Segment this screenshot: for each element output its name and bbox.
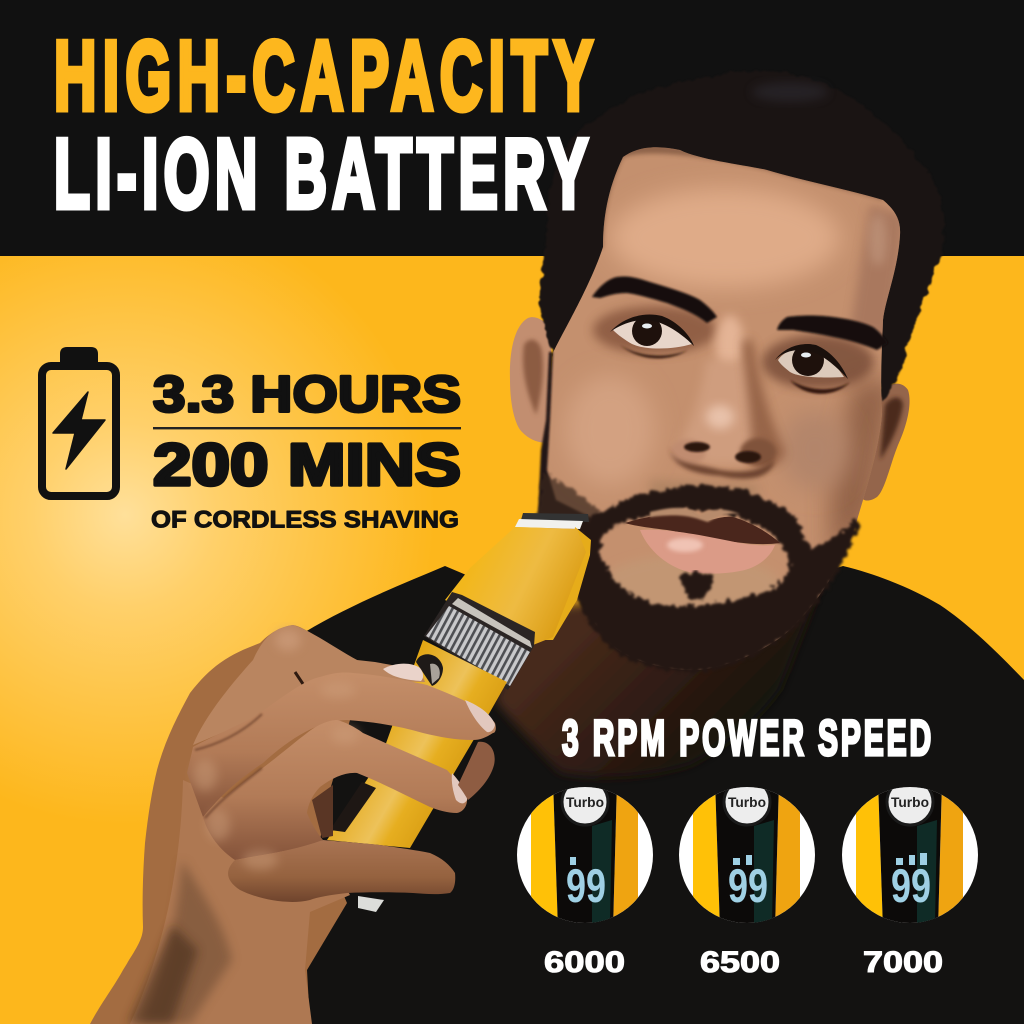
- trimmer button: [416, 654, 443, 686]
- upper lip: [625, 512, 780, 544]
- beard: [576, 487, 857, 670]
- right eyebrow: [777, 316, 888, 350]
- trimmer guard: [540, 527, 591, 640]
- eye socket shadows: [593, 306, 717, 354]
- speed dial 6000: [517, 779, 653, 979]
- dial close-up 2: 99: [728, 859, 768, 912]
- forearm and hand base: [90, 625, 357, 1024]
- thumb crease: [295, 672, 303, 684]
- speed dial 6500: [679, 779, 815, 979]
- title: [54, 22, 599, 229]
- index finger: [187, 672, 496, 817]
- lower lip shine: [667, 538, 703, 552]
- right cheek shade: [830, 380, 895, 560]
- arm hair light: [140, 860, 232, 1024]
- trimmer upper body: [445, 527, 586, 645]
- finger behind trimmer: [458, 742, 495, 800]
- thumb nail: [383, 664, 423, 681]
- runtime in minutes: 200 MINS: [153, 432, 461, 498]
- title line 2: LI-ION BATTERY: [54, 120, 594, 229]
- dial close-up 3: 99: [891, 859, 931, 912]
- nose bridge highlight: [716, 315, 744, 375]
- rpm value 7000: 7000: [863, 946, 943, 979]
- yellow background panel: [0, 250, 1024, 1024]
- hairline shadow: [603, 148, 883, 248]
- forehead highlight: [610, 188, 840, 288]
- soul patch: [680, 573, 714, 600]
- dial close-up 1: [517, 779, 653, 930]
- dial close-up 1: Turbo: [566, 794, 604, 810]
- black header band: [0, 0, 1024, 256]
- left eye: [610, 315, 694, 358]
- dial close-up 3: Turbo: [891, 794, 929, 810]
- nose tip highlight: [706, 405, 734, 429]
- nostrils: [684, 442, 710, 452]
- gap between fingers: [312, 785, 333, 838]
- lower lip: [640, 530, 775, 574]
- nose base: [670, 452, 776, 482]
- middle finger: [203, 720, 467, 860]
- chin skin: [600, 555, 780, 615]
- dial close-up 2: Turbo: [728, 794, 766, 810]
- hand: [90, 625, 496, 1024]
- rpm value 6000: 6000: [544, 946, 625, 979]
- right eye: [775, 344, 850, 394]
- trimmer dark lower ring: [424, 592, 535, 690]
- right temple shade: [850, 205, 905, 340]
- nose wings: [678, 440, 706, 461]
- dial close-up 3: [842, 779, 978, 930]
- right temple shine: [869, 214, 887, 266]
- battery runtime text block: [151, 366, 461, 534]
- trimmer end cap: [358, 896, 384, 912]
- icon: battery with lightning bolt: [42, 347, 116, 496]
- runtime caption: OF CORDLESS SHAVING: [151, 506, 459, 534]
- thumb base: [193, 625, 425, 745]
- arm hair dark: [128, 925, 198, 1024]
- neck: [495, 560, 830, 776]
- sideburn line: [538, 352, 592, 530]
- runtime in hours: 3.3 HOURS: [153, 366, 461, 422]
- chrome band: [452, 598, 532, 648]
- back of hand: [130, 780, 350, 1024]
- finger creases: [195, 714, 262, 818]
- rpm value 6500: 6500: [700, 946, 780, 979]
- left eyebrow: [592, 276, 717, 323]
- dial close-up 2: [679, 779, 815, 930]
- philtrum tone: [648, 479, 758, 495]
- speed dial 7000: [842, 779, 978, 979]
- index nail: [465, 700, 495, 732]
- lip ridge: [650, 508, 740, 522]
- trimmer: [327, 513, 591, 912]
- left ear: [510, 317, 552, 443]
- black t-shirt: [300, 566, 1024, 1024]
- face skin: [540, 147, 900, 670]
- trimmer long body: [327, 640, 507, 848]
- right ear: [860, 384, 910, 501]
- title line 1: HIGH-CAPACITY: [54, 22, 599, 131]
- dial close-up 1: 99: [566, 859, 606, 912]
- speed heading: 3 RPM POWER SPEED: [562, 710, 934, 766]
- hair highlight: [752, 82, 828, 102]
- ring finger: [228, 840, 455, 902]
- trimmer dark slot: [330, 782, 376, 832]
- knuckle highlights: [193, 682, 359, 870]
- left stubble: [538, 470, 600, 530]
- thumb knuckle highlight: [275, 629, 301, 651]
- left cheek light: [565, 375, 655, 485]
- middle nail: [452, 773, 467, 803]
- hair: [540, 71, 945, 400]
- trimmer blade: [521, 513, 589, 522]
- trimmer knurled ring: [426, 606, 530, 686]
- nose side shade: [742, 340, 785, 467]
- face shading and features: [565, 135, 905, 615]
